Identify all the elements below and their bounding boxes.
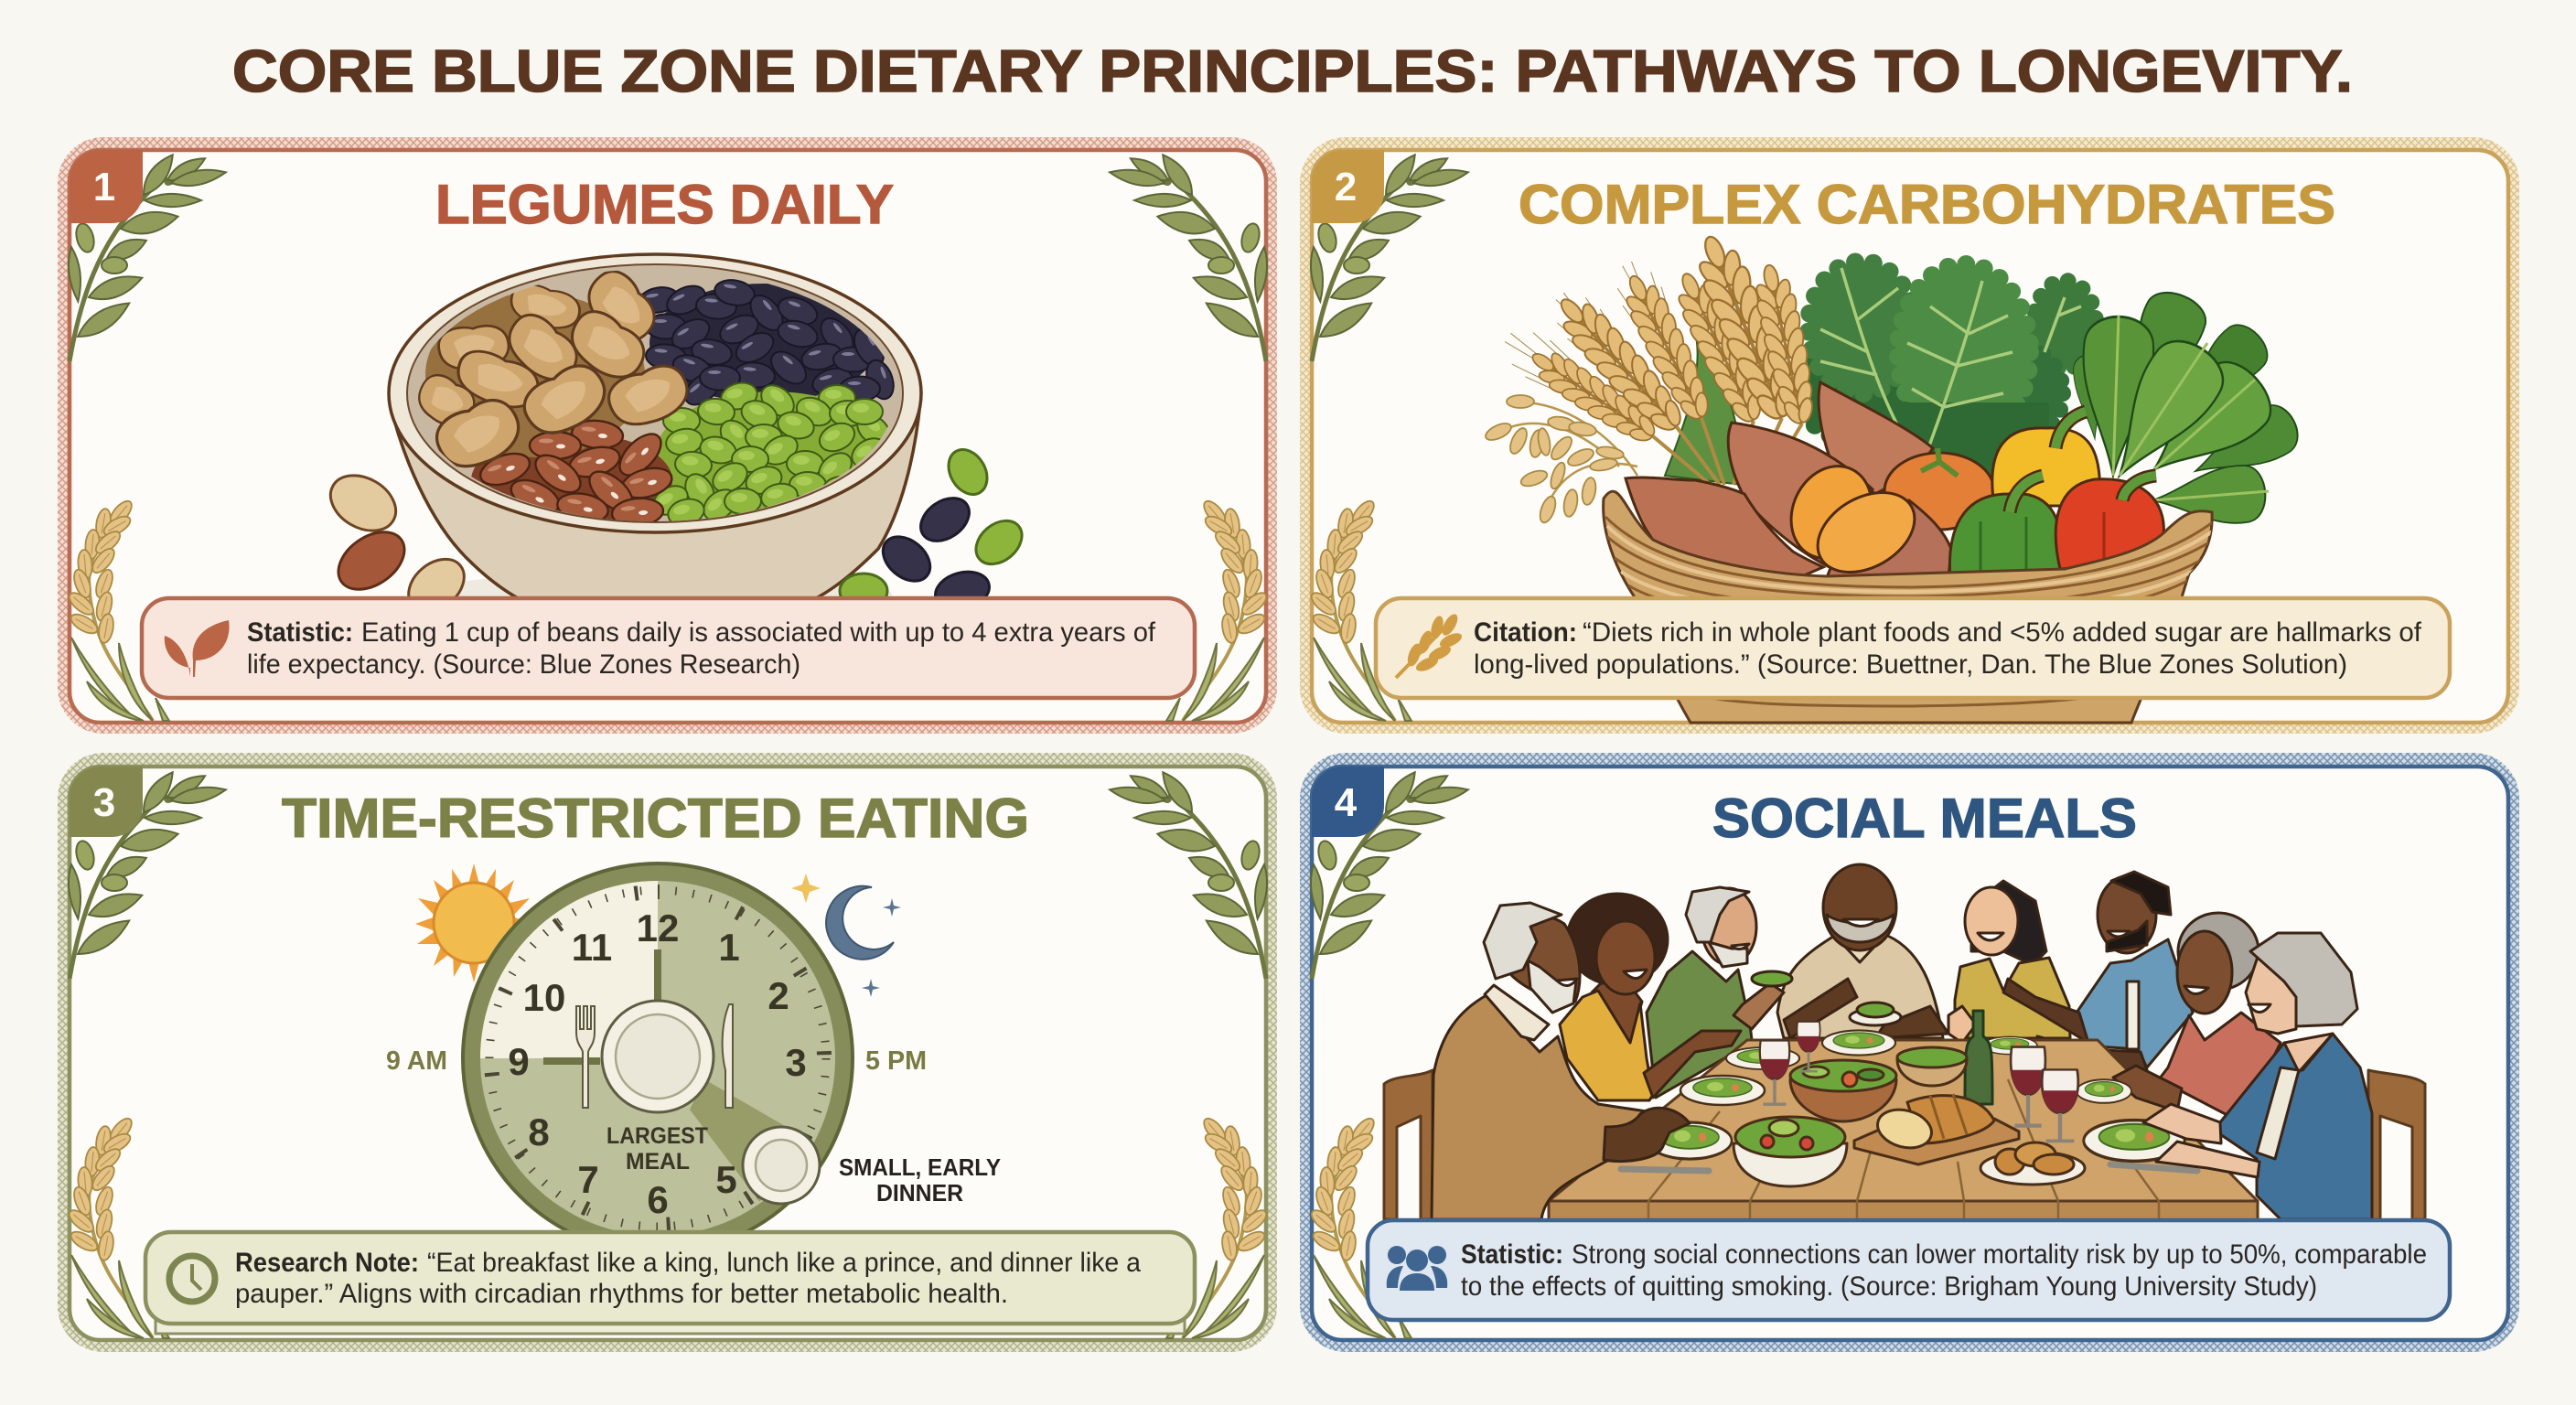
number badge 3: 3 [93, 780, 115, 825]
citation text: long-lived populations.” (Source: Buettner, Dan. The Blue Zones Solution) [1474, 649, 2347, 680]
icon: sprout [165, 620, 230, 677]
number badge 1: 1 [93, 165, 115, 209]
card frame [58, 137, 1277, 734]
illustration: vegetable basket [1483, 227, 2305, 723]
statistic text: Statistic: [1461, 1239, 1563, 1270]
panel 1: legumes daily [58, 137, 1277, 734]
green bowl [1897, 1047, 1967, 1086]
small early dinner label: SMALL, EARLY [839, 1153, 1001, 1181]
kale [1800, 262, 2096, 476]
card frame [58, 753, 1277, 1352]
panel 4: social meals [1300, 753, 2576, 1352]
large plate [602, 1001, 714, 1112]
bearded man in denim shirt [2003, 872, 2193, 1070]
icon: wheat [1396, 612, 1464, 678]
number badge 2 [1312, 150, 1384, 223]
dinner wedge [690, 1082, 785, 1202]
statistic text: life expectancy. (Source: Blue Zones Research) [247, 649, 800, 680]
small early dinner label: DINNER [876, 1179, 963, 1207]
wine bottle [1965, 1011, 1992, 1104]
tableware [1621, 1011, 2197, 1186]
callout: statistic [1368, 1220, 2450, 1320]
citation text: Citation: [1474, 617, 1577, 648]
statistic text: to the effects of quitting smoking. (Source: Brigham Young University Study) [1461, 1271, 2317, 1302]
clock numerals: 12 [637, 906, 679, 949]
man in tan sweater [1432, 903, 1690, 1219]
spinach [2072, 284, 2305, 529]
chairs [1384, 1070, 2425, 1219]
woman with grey bob and blue cardigan [2143, 933, 2372, 1219]
illustration: clock [463, 863, 853, 1253]
heading: SOCIAL MEALS [1712, 788, 2137, 849]
woman in mustard top [1948, 881, 2070, 1043]
man in beige shirt [1777, 864, 1948, 1038]
small plate [743, 1127, 820, 1204]
green blades behind wheat [1665, 343, 1743, 485]
statistic text: Statistic: [247, 617, 353, 648]
icon: people [1387, 1246, 1447, 1291]
wreath decorations [66, 767, 1270, 1338]
icon: moon and stars [791, 874, 901, 997]
clock numerals: 6 [647, 1178, 669, 1221]
heading: LEGUMES DAILY [435, 174, 894, 235]
clock numerals: 11 [572, 926, 612, 969]
5 pm label: 5 PM [865, 1046, 927, 1076]
wreath decorations [66, 150, 1270, 721]
wheat bunch [1483, 227, 1825, 524]
clock numerals [508, 906, 807, 1221]
table [1549, 1040, 2258, 1221]
research note text: Research Note: [235, 1248, 419, 1278]
statistic text [1461, 1239, 2427, 1302]
number badge 2: 2 [1335, 165, 1357, 209]
clock numerals: 10 [523, 976, 565, 1019]
largest meal label: MEAL [626, 1149, 690, 1174]
citation text: “Diets rich in whole plant foods and <5% added sugar are hallmarks of [1583, 617, 2422, 648]
man in green shirt [1647, 887, 1792, 1098]
clock numerals: 5 [715, 1158, 737, 1201]
icon: clock [169, 1256, 215, 1302]
wreath decorations [1308, 150, 2576, 721]
illustration: shared meal [1384, 864, 2425, 1221]
card frame [1300, 753, 2519, 1352]
roll plate [1980, 1142, 2085, 1185]
citation text [1474, 617, 2422, 680]
statistic text: Eating 1 cup of beans daily is associated with up to 4 extra years of [361, 617, 1156, 648]
card frame [1300, 137, 2519, 734]
9 am label: 9 AM [386, 1046, 447, 1076]
statistic text: Strong social connections can lower mortality risk by up to 50%, comparable [1572, 1239, 2427, 1270]
clock numerals: 8 [528, 1110, 550, 1153]
woman in pink top [2113, 913, 2281, 1122]
illustration: sun [415, 863, 532, 982]
illustration: bowl of beans [321, 254, 1030, 622]
tick marks [489, 890, 826, 1227]
woman in yellow blouse [1560, 894, 1741, 1100]
clock numerals: 1 [718, 926, 740, 969]
clock numerals: 2 [767, 974, 789, 1017]
callout: research note [145, 1232, 1195, 1334]
wine glasses [1760, 1022, 2078, 1141]
heading: TIME-RESTRICTED EATING [282, 788, 1029, 849]
largest meal label [606, 1123, 708, 1174]
fork and knife [576, 1004, 733, 1108]
research note text: pauper.” Aligns with circadian rhythms for better metabolic health. [235, 1279, 1008, 1309]
basket [1604, 491, 2214, 723]
beans in bowl [411, 263, 898, 530]
callout: statistic [142, 598, 1195, 698]
small early dinner label [839, 1153, 1001, 1207]
callout: citation [1376, 598, 2450, 698]
number badge 4 [1312, 767, 1384, 837]
sweet potatoes, tomato and peppers [1626, 382, 2163, 588]
number badge 4: 4 [1335, 780, 1358, 825]
panel 2: complex carbohydrates [1300, 137, 2576, 734]
panel 3: time-restricted eating [58, 753, 1277, 1352]
wooden salad bowl [1790, 1060, 1896, 1121]
white salad bowl [1733, 1117, 1847, 1186]
largest meal label: LARGEST [606, 1123, 708, 1149]
loose beans [321, 443, 1030, 622]
wreath decorations [1308, 767, 2576, 1338]
clock numerals: 9 [508, 1040, 530, 1083]
bread board [1854, 1094, 2019, 1164]
number badge 1 [70, 150, 143, 223]
statistic text [247, 617, 1156, 680]
title: CORE BLUE ZONE DIETARY PRINCIPLES: PATHWAYS TO LONGEVITY. [232, 38, 2353, 104]
research note text [235, 1248, 1141, 1309]
clock numerals: 3 [785, 1041, 807, 1084]
research note text: “Eat breakfast like a king, lunch like a prince, and dinner like a [427, 1248, 1141, 1278]
heading: COMPLEX CARBOHYDRATES [1519, 174, 2335, 235]
number badge 3 [70, 767, 143, 837]
cutlery [1621, 1164, 2197, 1171]
clock numerals: 7 [577, 1158, 599, 1201]
clock hands [543, 949, 658, 1061]
